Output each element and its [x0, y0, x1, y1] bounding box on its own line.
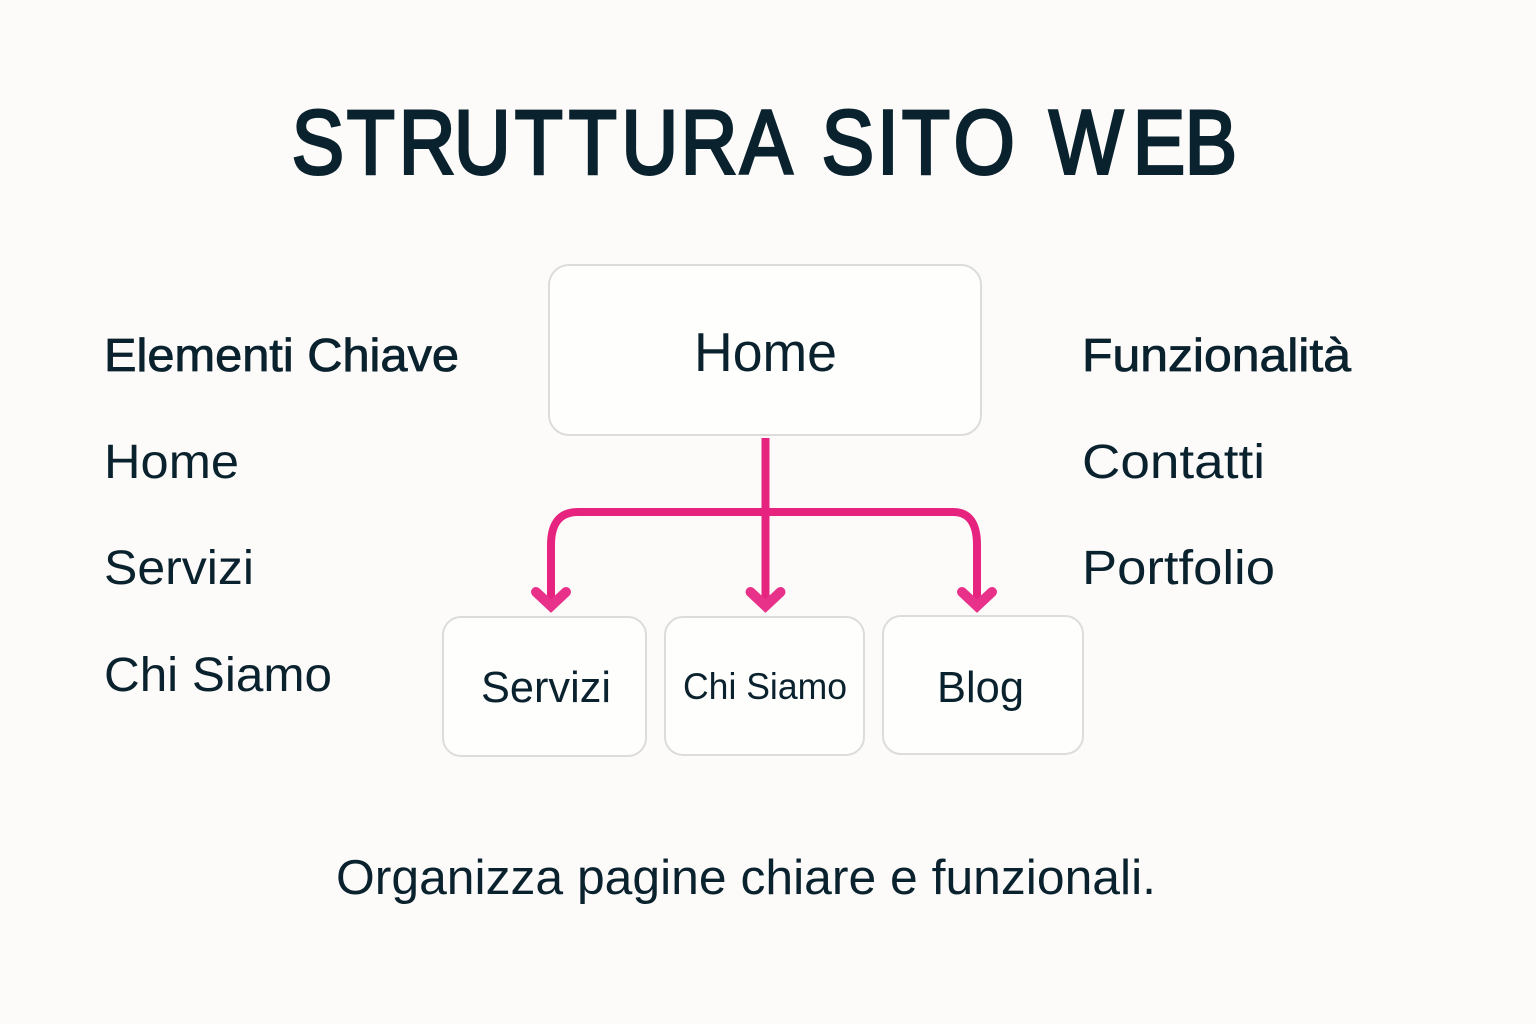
list item: contatti: Contatti: [1082, 436, 1265, 489]
node: home: [549, 265, 981, 435]
arrows: home to child pages: [536, 438, 992, 606]
panel: elementi chiave list: [104, 329, 459, 702]
panel: funzionalita list: [1082, 329, 1351, 595]
node: blog: Blog: [937, 663, 1024, 712]
node: chi siamo: [665, 617, 864, 755]
list item: servizi: Servizi: [104, 542, 254, 595]
node: chi siamo: Chi Siamo: [683, 666, 847, 707]
heading: elementi chiave: Elementi Chiave: [104, 329, 459, 381]
list item: home: Home: [104, 436, 239, 489]
heading: funzionalita: Funzionalità: [1082, 329, 1351, 381]
node: servizi: [443, 617, 646, 756]
node: servizi: Servizi: [481, 663, 611, 712]
list item: portfolio: Portfolio: [1082, 542, 1275, 595]
list item: chi siamo: Chi Siamo: [104, 649, 332, 702]
tagline: Organizza pagine chiare e funzionali.: [336, 851, 1156, 905]
node: home: Home: [694, 321, 837, 383]
title: STRUTTURA SITO WEB: [292, 91, 1237, 193]
node: blog: [883, 616, 1083, 754]
